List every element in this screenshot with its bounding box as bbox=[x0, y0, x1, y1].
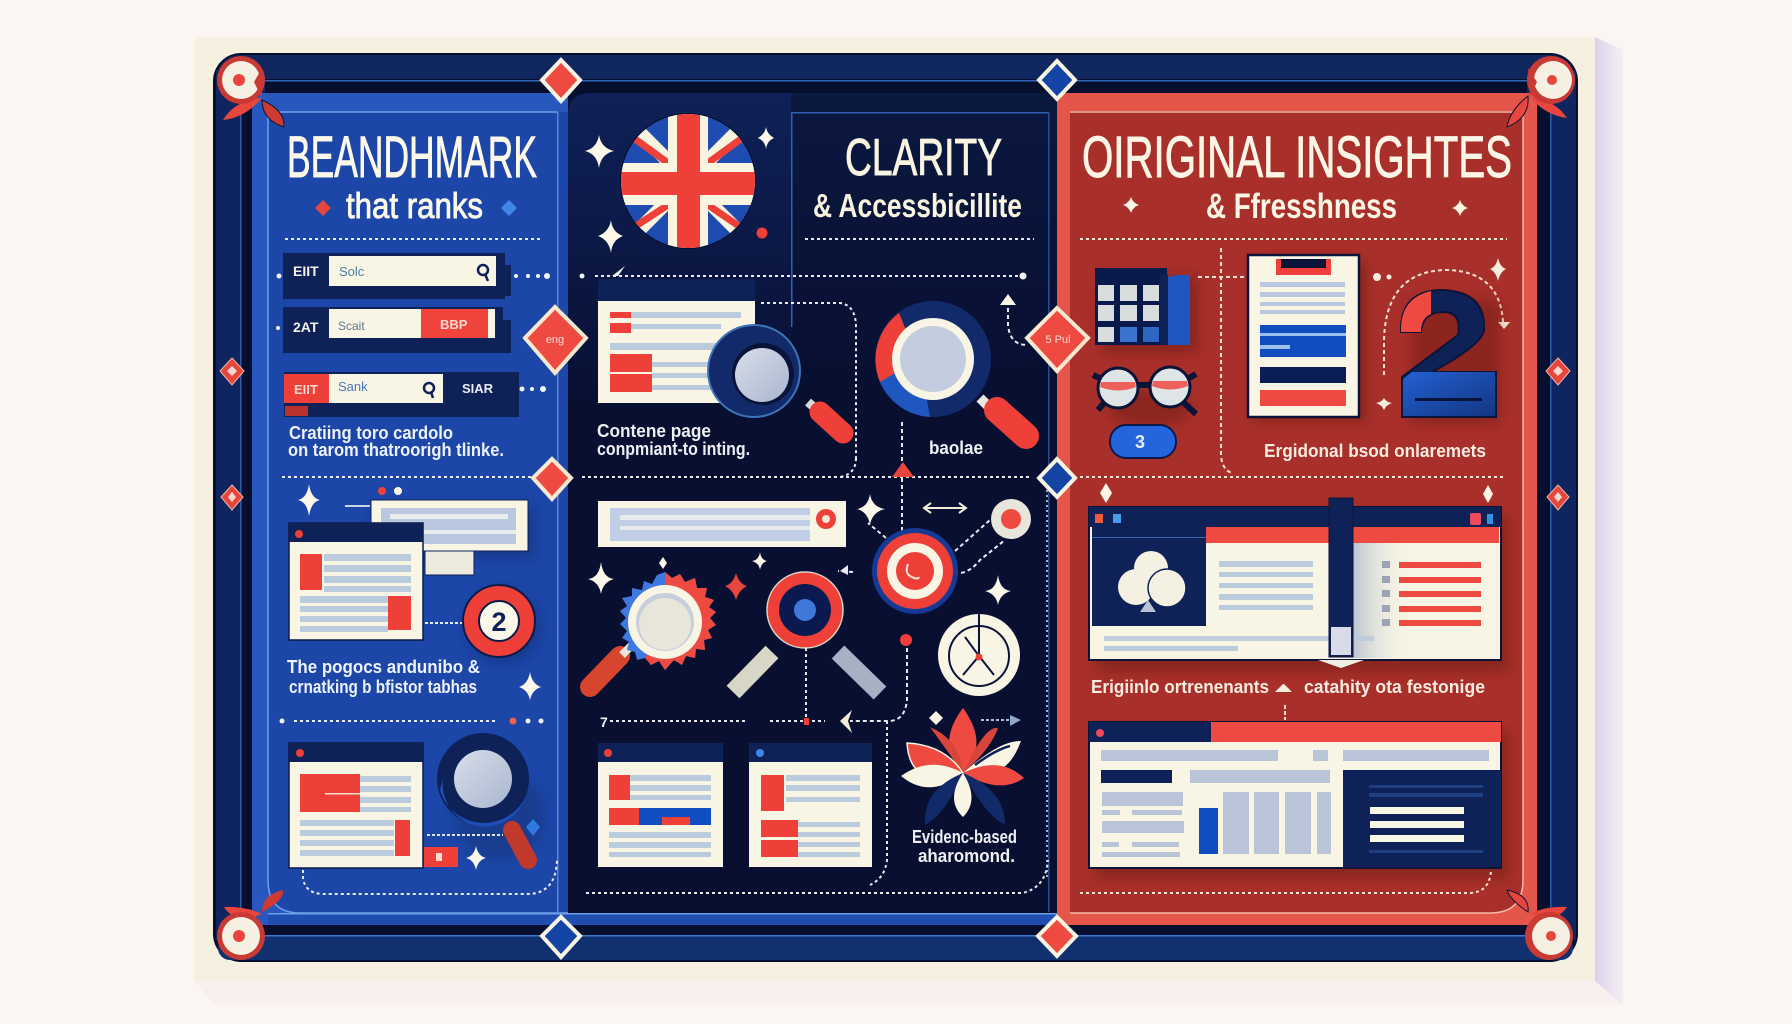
magnifier 1 bbox=[708, 325, 843, 433]
wide dashboard window bbox=[1089, 722, 1509, 879]
seal magnifier bbox=[590, 572, 716, 687]
large numeral 2 bbox=[1401, 290, 1500, 424]
divider dots bbox=[282, 476, 535, 478]
label: seven: 7 bbox=[600, 714, 608, 730]
icon: flower bbox=[901, 708, 1024, 825]
diamond: mid red bbox=[533, 459, 571, 499]
search bar 2: Scait bbox=[338, 319, 365, 333]
search bar 2: BBP bbox=[440, 317, 468, 332]
caption 3: Contene page bbox=[597, 421, 711, 441]
corner ornament: top left bbox=[217, 56, 284, 127]
panel: blue benchmark bbox=[252, 93, 568, 925]
divider dots bbox=[1080, 476, 1505, 478]
stars row bbox=[588, 494, 1011, 605]
icon: glasses bbox=[1093, 367, 1196, 426]
subheading: accessibility: & Accessbicillite bbox=[813, 187, 1022, 224]
search bar 1 bbox=[283, 253, 511, 299]
caption 4: Evidenc-based bbox=[912, 827, 1017, 847]
diamond: large red right bbox=[1027, 308, 1088, 371]
pill badge: 3 bbox=[1135, 432, 1145, 452]
heading: clarity: CLARITY bbox=[845, 129, 1002, 187]
divider dots bbox=[805, 238, 1034, 240]
icon: cloud tree bbox=[1118, 551, 1186, 612]
corner ornament: bottom left bbox=[217, 890, 283, 960]
search bar 3 bbox=[284, 372, 519, 417]
target icon bbox=[838, 520, 1005, 614]
divider dots with arrow bbox=[580, 266, 1026, 280]
small triangle bbox=[1275, 684, 1292, 692]
red tag bbox=[424, 819, 540, 870]
sparkles beside subheading bbox=[1123, 197, 1468, 216]
red star bbox=[725, 573, 747, 600]
search bar 3: Sank bbox=[338, 379, 368, 394]
caption 3: conpmiant-to inting. bbox=[597, 439, 750, 459]
outer frame bbox=[213, 53, 1578, 962]
dots bbox=[280, 718, 544, 724]
divider dots bbox=[294, 720, 498, 722]
search bar 3: SIAR bbox=[462, 381, 494, 396]
clock bbox=[938, 614, 1020, 696]
dashed cross connector bbox=[1198, 248, 1246, 473]
arrow up with dashed curve bbox=[1000, 294, 1027, 345]
icon: small diamonds beside subheading bbox=[315, 200, 517, 216]
bookmark spine bbox=[1318, 498, 1364, 668]
number badge 2: 2 bbox=[491, 607, 507, 637]
paper sheet with shadow bbox=[194, 37, 1623, 1005]
search bar 2: 2AT bbox=[293, 319, 319, 335]
diamond: large red left: eng bbox=[546, 334, 564, 346]
large browser window bbox=[1089, 507, 1509, 672]
document A bbox=[598, 743, 723, 867]
icon: grid book bbox=[1095, 268, 1198, 353]
caption 6 right: catahity ota festonige bbox=[1304, 677, 1485, 697]
strip document bbox=[598, 501, 846, 547]
dots beside document bbox=[1373, 273, 1392, 281]
bottom dashed line bbox=[586, 860, 1048, 893]
caption 4 bbox=[912, 827, 1017, 866]
corner ornament: bottom right bbox=[1507, 890, 1573, 960]
side diamonds bbox=[220, 358, 1570, 510]
subheading: freshness: & Ffresshness bbox=[1206, 187, 1397, 226]
dashed connector with arrows bbox=[610, 634, 912, 885]
caption 4: aharomond. bbox=[918, 846, 1015, 866]
diamond: bottom blue bbox=[542, 917, 580, 957]
search bar 2 bbox=[283, 307, 511, 353]
stars around flag bbox=[585, 127, 774, 253]
sparkle and arrow near flower bbox=[929, 711, 1021, 726]
bottom document bbox=[289, 743, 423, 868]
panel: red insights bbox=[1057, 93, 1537, 925]
dashed connector bbox=[761, 303, 856, 477]
corner ornament: top right bbox=[1507, 56, 1575, 127]
front document bbox=[289, 523, 423, 640]
double arrow bbox=[924, 503, 966, 513]
magnifier 2 bbox=[875, 301, 1026, 436]
dashed bottom outline bbox=[303, 860, 557, 894]
back document bbox=[345, 487, 535, 575]
diamond: bottom red bbox=[1038, 917, 1076, 956]
sparkles bbox=[1100, 483, 1493, 503]
divider dots bbox=[285, 238, 543, 240]
divider dots with red arrow bbox=[582, 422, 1032, 560]
diamond: top red bbox=[542, 60, 580, 101]
caption 6 left: Erigiinlo ortrenenants bbox=[1091, 677, 1269, 697]
star bbox=[298, 484, 320, 516]
diamond: mid blue bbox=[1039, 459, 1075, 497]
document B bbox=[749, 743, 872, 867]
caption 1: on tarom thatroorigh tlinke. bbox=[288, 440, 504, 460]
caption 2: crnatking b bfistor tabhas bbox=[289, 677, 477, 697]
caption 1: Cratiing toro cardolo bbox=[289, 423, 453, 443]
search bar 3: EIIT bbox=[294, 382, 318, 397]
content page document bbox=[598, 279, 755, 403]
diamond: large red left bbox=[525, 307, 586, 373]
search bar 1: EIIT bbox=[293, 263, 319, 279]
label: baolae: baolae bbox=[929, 438, 983, 458]
panel: dark clarity bbox=[268, 93, 1057, 925]
magnifier 3 with two handles bbox=[733, 572, 880, 693]
icon: union jack flag bbox=[620, 113, 768, 249]
connector dots bbox=[276, 273, 550, 392]
bottom dashed line bbox=[1080, 870, 1491, 893]
heading: benchmark: BEANDHMARK bbox=[287, 125, 537, 190]
star bbox=[519, 672, 541, 700]
caption 3 bbox=[597, 421, 750, 459]
caption 2: The pogocs andunibo & bbox=[287, 657, 480, 677]
caption 1 bbox=[288, 423, 504, 460]
search bar 1: Solc bbox=[339, 264, 365, 279]
diamond: top blue bbox=[1039, 61, 1075, 99]
vertical blue dashed rule bbox=[1046, 480, 1048, 880]
small circle node bbox=[991, 499, 1031, 539]
heading: original insights: OIRIGINAL INSIGHTES bbox=[1082, 125, 1512, 190]
magnifier bbox=[437, 733, 544, 860]
caption 2 bbox=[287, 657, 480, 697]
dashed arc with arrow bbox=[1376, 258, 1510, 410]
pill badge bbox=[1110, 425, 1176, 458]
subheading: that ranks: that ranks bbox=[346, 185, 483, 226]
caption 5: Ergidonal bsod onlaremets bbox=[1264, 441, 1486, 461]
dash connector bbox=[1284, 705, 1286, 720]
tall document bbox=[1248, 255, 1366, 422]
number badge 2 bbox=[425, 585, 539, 663]
divider dots bbox=[1080, 238, 1507, 240]
diamond: large red right: 5 Pul bbox=[1045, 334, 1071, 346]
